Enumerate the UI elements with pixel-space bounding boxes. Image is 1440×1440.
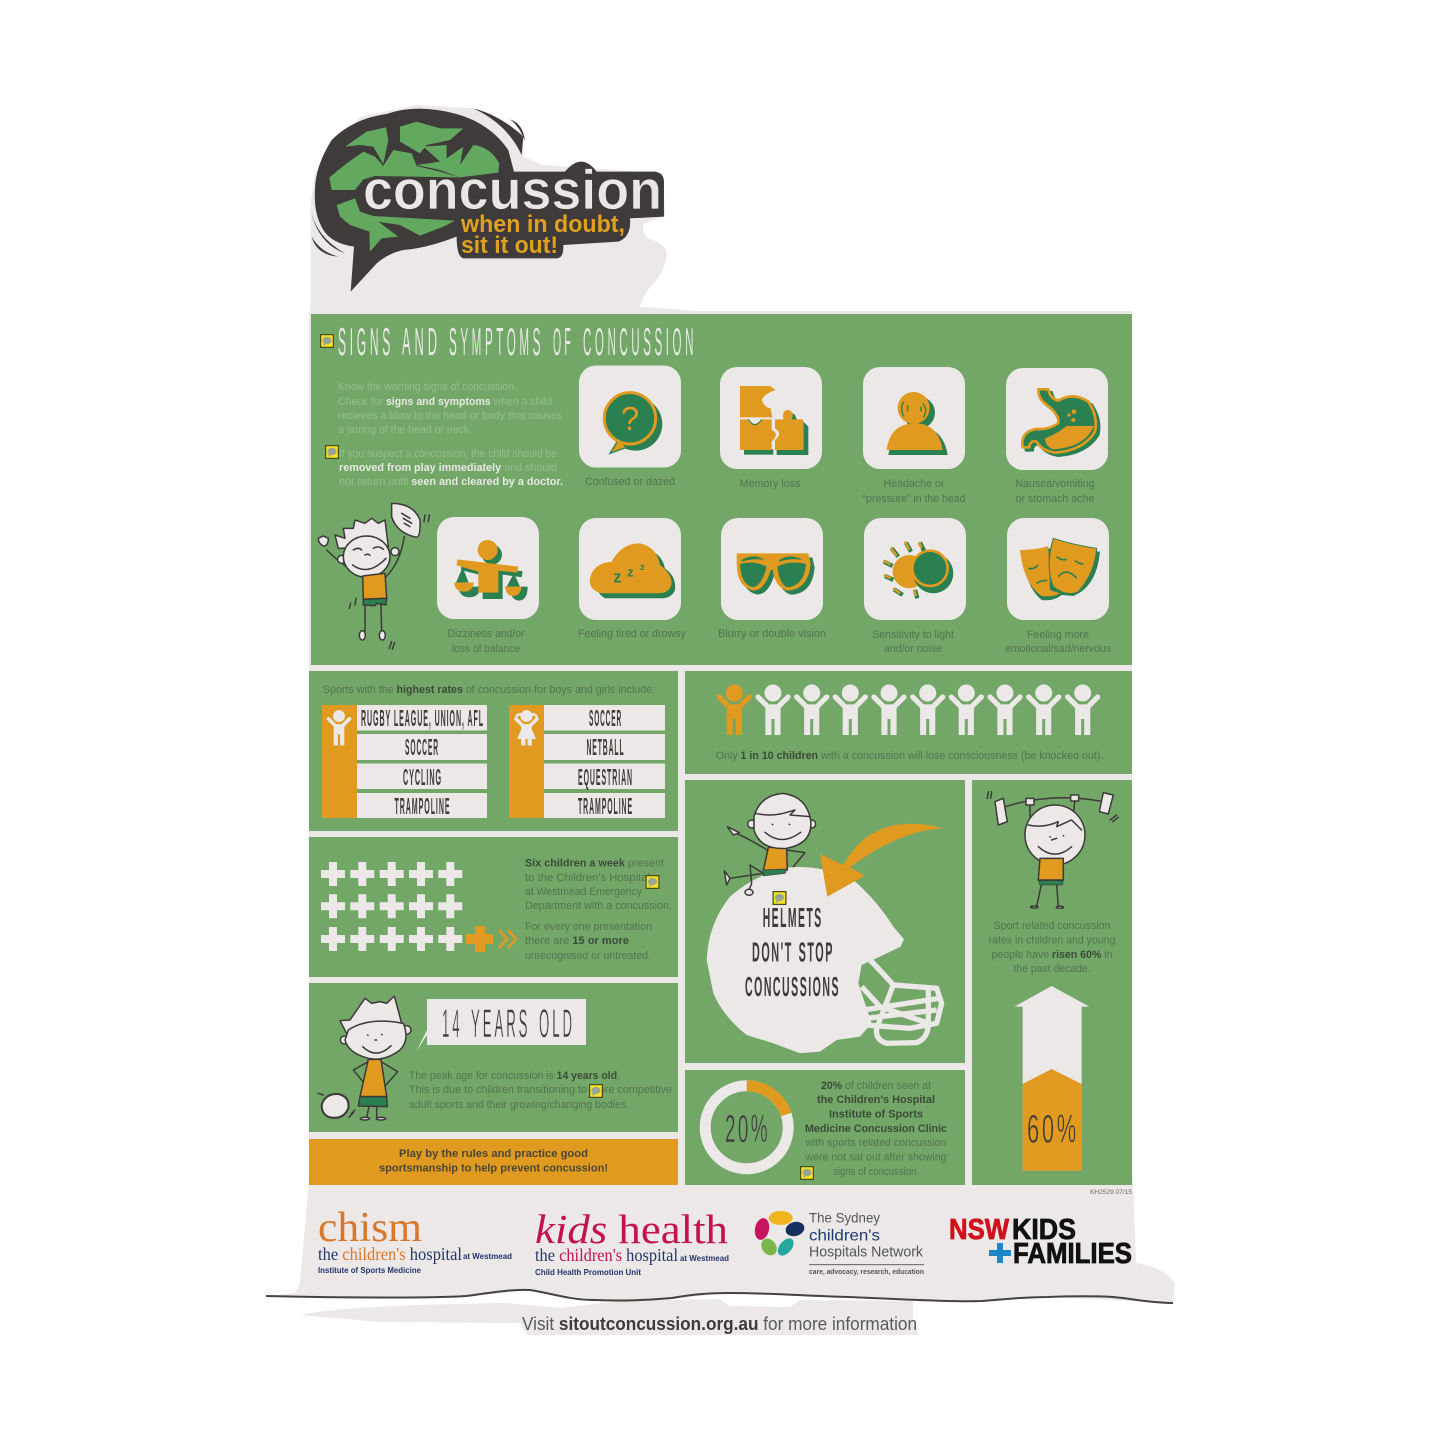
text: peak age: The peak age for concussion is 14 years old. bbox=[409, 1070, 620, 1082]
panel background bbox=[309, 671, 678, 831]
heading: SIGNS bbox=[338, 321, 394, 364]
logo: NSW Kids and Families: KIDS bbox=[1012, 1214, 1076, 1246]
panel: signs and symptoms bbox=[311, 314, 1132, 665]
panel: helmets: CONCUSSIONS bbox=[745, 971, 840, 1002]
text: risen 60 percent: rates in children and young bbox=[988, 934, 1116, 946]
icon: chat marker helmet bbox=[773, 892, 786, 904]
intro text: removed from play immediately and should bbox=[339, 462, 557, 474]
icon tile: tired cloud: z bbox=[627, 566, 634, 580]
boys list: TRAMPOLINE bbox=[394, 793, 450, 819]
panel background bbox=[685, 1070, 965, 1185]
logo: kids health: Child Health Promotion Unit bbox=[535, 1267, 641, 1277]
intro text: Know the warning signs of concussion. bbox=[338, 381, 517, 393]
logo: chism: chism bbox=[318, 1205, 422, 1251]
banner text bbox=[379, 1148, 608, 1174]
panel: 14 years old bbox=[309, 983, 678, 1132]
arrow: orange chevrons bbox=[499, 930, 516, 948]
panel background bbox=[685, 671, 1132, 774]
text: 20 percent: the Children's Hospital bbox=[817, 1094, 935, 1106]
banner text: sportsmanship to help prevent concussion! bbox=[379, 1162, 608, 1174]
footer call to action: Visit sitoutconcussion.org.au for more information bbox=[522, 1314, 917, 1334]
panel background bbox=[309, 837, 678, 977]
panel: 60 percent rise bbox=[972, 780, 1132, 1185]
panel background bbox=[685, 780, 965, 1063]
helmet heading bbox=[745, 902, 840, 1002]
chart: rising arrow bbox=[1014, 986, 1089, 1171]
intro line: Sports with the highest rates of concussion for boys and girls include: bbox=[323, 684, 655, 696]
logo: chism bbox=[318, 1205, 512, 1275]
label: emotional: Feeling more bbox=[1027, 629, 1089, 641]
document code: KH2529 07/15 bbox=[1090, 1190, 1133, 1196]
brain lobes bbox=[329, 122, 499, 252]
text: peak age bbox=[409, 1070, 672, 1111]
intro text: a jarring of the head or neck. bbox=[338, 424, 472, 436]
text: 20 percent: with sports related concussion bbox=[805, 1137, 946, 1149]
icon: chat marker 20 percent bbox=[801, 1167, 813, 1179]
text: 20 percent: were not sat out after showing bbox=[805, 1152, 946, 1164]
label: sensitivity bbox=[872, 629, 954, 655]
logo: Sydney children's hospitals network: children's bbox=[809, 1228, 880, 1244]
icon tile: sensitivity sun bbox=[864, 518, 966, 620]
logo wordmark: concussion bbox=[363, 158, 662, 221]
text: six children: to the Children's Hospital bbox=[525, 872, 650, 884]
chart: donut bbox=[705, 1086, 788, 1169]
panel: helmets bbox=[685, 780, 965, 1063]
label: headache bbox=[862, 478, 966, 505]
panel: signs and symptoms: CONCUSSION bbox=[583, 321, 697, 364]
panel: sports with highest rates bbox=[309, 671, 678, 831]
label: memory loss: Memory loss bbox=[740, 478, 801, 490]
illustration: helmet bbox=[707, 867, 942, 1053]
logo: kids health: at Westmead bbox=[680, 1254, 729, 1263]
icon tile: tired cloud: z bbox=[613, 568, 622, 587]
logo: kids health: kids health bbox=[535, 1206, 728, 1252]
logo: kids health: the children's hospital bbox=[535, 1245, 678, 1265]
icon tile: tired cloud bbox=[579, 518, 681, 620]
text: six children bbox=[525, 858, 672, 962]
logo tagline line one: when in doubt, bbox=[460, 211, 625, 238]
logo tagline line two: sit it out! bbox=[461, 232, 558, 259]
heading: AND bbox=[402, 321, 441, 364]
logo: kids health bbox=[535, 1206, 729, 1277]
logo: NSW Kids and Families bbox=[949, 1214, 1132, 1270]
icon tile: tired cloud: z bbox=[640, 562, 645, 572]
label: blurry vision: Blurry or double vision bbox=[718, 628, 826, 640]
label: nausea: or stomach ache bbox=[1016, 493, 1094, 505]
label: dizziness bbox=[448, 628, 525, 655]
text: risen 60 percent: the past decade. bbox=[1014, 963, 1090, 975]
illustration: weightlifting kid bbox=[987, 792, 1118, 908]
logo: NSW Kids and Families: NSW bbox=[949, 1214, 1010, 1246]
heading bbox=[338, 321, 697, 364]
girls list: SOCCER bbox=[589, 705, 622, 731]
panel: 14 years old: 14 YEARS OLD bbox=[442, 1002, 575, 1046]
label: nausea bbox=[1016, 478, 1094, 505]
icon: chat marker six children bbox=[646, 876, 659, 888]
intro text bbox=[338, 381, 563, 488]
callout: 14 years old bbox=[416, 999, 586, 1052]
logo: chism: Institute of Sports Medicine bbox=[318, 1265, 421, 1275]
illustration: kid sitting on helmet bbox=[724, 793, 816, 895]
heading: OF bbox=[553, 321, 574, 364]
label: tired: Feeling tired or drowsy bbox=[578, 628, 686, 640]
text: knocked out: Only 1 in 10 children with a concussion will lose consciousness (be knocked out). bbox=[716, 750, 1103, 762]
panel: sports with highest rates: RUGBY LEAGUE, UNION, AFL bbox=[361, 705, 484, 731]
label: headache: “pressure” in the head bbox=[862, 493, 966, 505]
text: peak age: adult sports and their growing/changing bodies. bbox=[409, 1099, 629, 1111]
boys list: SOCCER bbox=[405, 734, 439, 760]
girls list bbox=[509, 705, 665, 819]
logo: concussion brain speech bubble bbox=[310, 108, 664, 292]
panel: 1 in 10 children bbox=[685, 671, 1132, 774]
text: risen 60 percent: people have risen 60% in bbox=[992, 949, 1112, 961]
text: six children: Department with a concussion. bbox=[525, 900, 672, 912]
paper background: logo area bbox=[311, 105, 720, 313]
boys list bbox=[322, 705, 487, 819]
icon tile: confused: ? bbox=[621, 401, 639, 438]
icon tile: confused bbox=[579, 366, 681, 468]
text: six children: Six children a week present bbox=[525, 858, 664, 870]
logo: Sydney children's hospitals network: The Sydney bbox=[809, 1210, 880, 1226]
intro text: recieves a blow to the head or body that causes bbox=[338, 410, 562, 422]
label: headache: Headache or bbox=[884, 478, 945, 490]
logo: Sydney children's hospitals network bbox=[753, 1210, 924, 1276]
wavy ground line bbox=[266, 1290, 1173, 1303]
panel: 20 percent bbox=[685, 1070, 965, 1185]
panel: six children a week bbox=[309, 837, 678, 977]
label: dizziness: loss of balance bbox=[452, 643, 520, 655]
logo: Sydney children's hospitals network: care, advocacy, research, education bbox=[809, 1269, 924, 1276]
logo: NSW Kids and Families: FAMILIES bbox=[1013, 1238, 1132, 1270]
icon: chat marker intro bbox=[326, 446, 338, 458]
label: nausea: Nausea/vomiting bbox=[1016, 478, 1094, 490]
text: 20 percent: 20% of children seen at bbox=[821, 1080, 931, 1092]
label: sensitivity: and/or noise bbox=[884, 643, 942, 655]
icon tile: emotional masks bbox=[1007, 518, 1109, 620]
icon: chat marker 14 years bbox=[590, 1085, 602, 1097]
panel: sports with highest rates: EQUESTRIAN bbox=[578, 764, 633, 790]
logo: chism: at Westmead bbox=[463, 1252, 512, 1261]
icon tile: memory loss puzzle bbox=[720, 367, 822, 469]
text: six children: there are 15 or more bbox=[525, 935, 629, 947]
intro text: Check for signs and symptoms when a child bbox=[338, 396, 552, 408]
icon: chat marker title bbox=[321, 335, 333, 347]
paper background: panel gutters bbox=[309, 311, 1132, 1189]
chart: donut: 20% bbox=[725, 1108, 770, 1151]
panel: helmets: HELMETS bbox=[763, 902, 823, 933]
panel background bbox=[309, 983, 678, 1132]
text: six children: unrecognised or untreated. bbox=[525, 950, 651, 962]
text: peak age: This is due to children transitioning to more competitive bbox=[409, 1084, 672, 1096]
illustration: cheering kid with football bbox=[318, 503, 429, 649]
text: six children: at Westmead Emergency bbox=[525, 886, 642, 898]
paper background: lower smear bbox=[300, 1299, 919, 1335]
chart value: 60 percent: 60% bbox=[1027, 1108, 1079, 1152]
text: 20 percent bbox=[805, 1080, 947, 1178]
heading: SYMPTOMS bbox=[449, 321, 544, 364]
label: emotional: emotional/sad/nervous bbox=[1005, 643, 1111, 655]
label: confused: Confused or dazed bbox=[585, 476, 675, 488]
label: sensitivity: Sensitivity to light bbox=[872, 629, 954, 641]
arrow: orange curved bbox=[820, 824, 943, 897]
panel: sportsmanship banner bbox=[309, 1139, 678, 1185]
label: emotional bbox=[1005, 629, 1111, 655]
text: risen 60 percent bbox=[988, 920, 1116, 975]
brain outline with motion marks bbox=[310, 108, 664, 292]
paper background: footer area bbox=[266, 1180, 1175, 1303]
logo: chism: the children's hospital bbox=[318, 1244, 462, 1264]
text: 20 percent: signs of concussion. bbox=[833, 1166, 919, 1178]
girls list: NETBALL bbox=[586, 734, 624, 760]
panel: sports with highest rates: TRAMPOLINE bbox=[578, 793, 633, 819]
icon tile: dizziness scales bbox=[437, 517, 539, 619]
panel background bbox=[972, 780, 1132, 1185]
text: risen 60 percent: Sport related concussion bbox=[994, 920, 1110, 932]
icon tile: headache bbox=[863, 367, 965, 469]
icon tile: nausea stomach bbox=[1006, 368, 1108, 470]
panel background bbox=[311, 314, 1132, 665]
icon tile: blurry vision glasses bbox=[721, 518, 823, 620]
text: 20 percent: Medicine Concussion Clinic bbox=[805, 1123, 947, 1135]
text: 20 percent: Institute of Sports bbox=[829, 1108, 923, 1120]
crosses pictogram bbox=[321, 862, 493, 952]
logo: Sydney children's hospitals network: Hospitals Network bbox=[809, 1244, 923, 1260]
text: six children: For every one presentation bbox=[525, 921, 652, 933]
boys list: CYCLING bbox=[403, 764, 442, 790]
intro text: If you suspect a concussion, the child should be bbox=[339, 448, 557, 460]
label: dizziness: Dizziness and/or bbox=[448, 628, 525, 640]
illustration: boy with ball bbox=[318, 996, 411, 1120]
panel: helmets: DON'T STOP bbox=[752, 937, 834, 968]
banner background bbox=[309, 1139, 678, 1185]
banner text: Play by the rules and practice good bbox=[399, 1148, 588, 1160]
intro text: not return until seen and cleared by a doctor. bbox=[339, 476, 563, 488]
pictogram: ten children bbox=[719, 685, 1098, 735]
